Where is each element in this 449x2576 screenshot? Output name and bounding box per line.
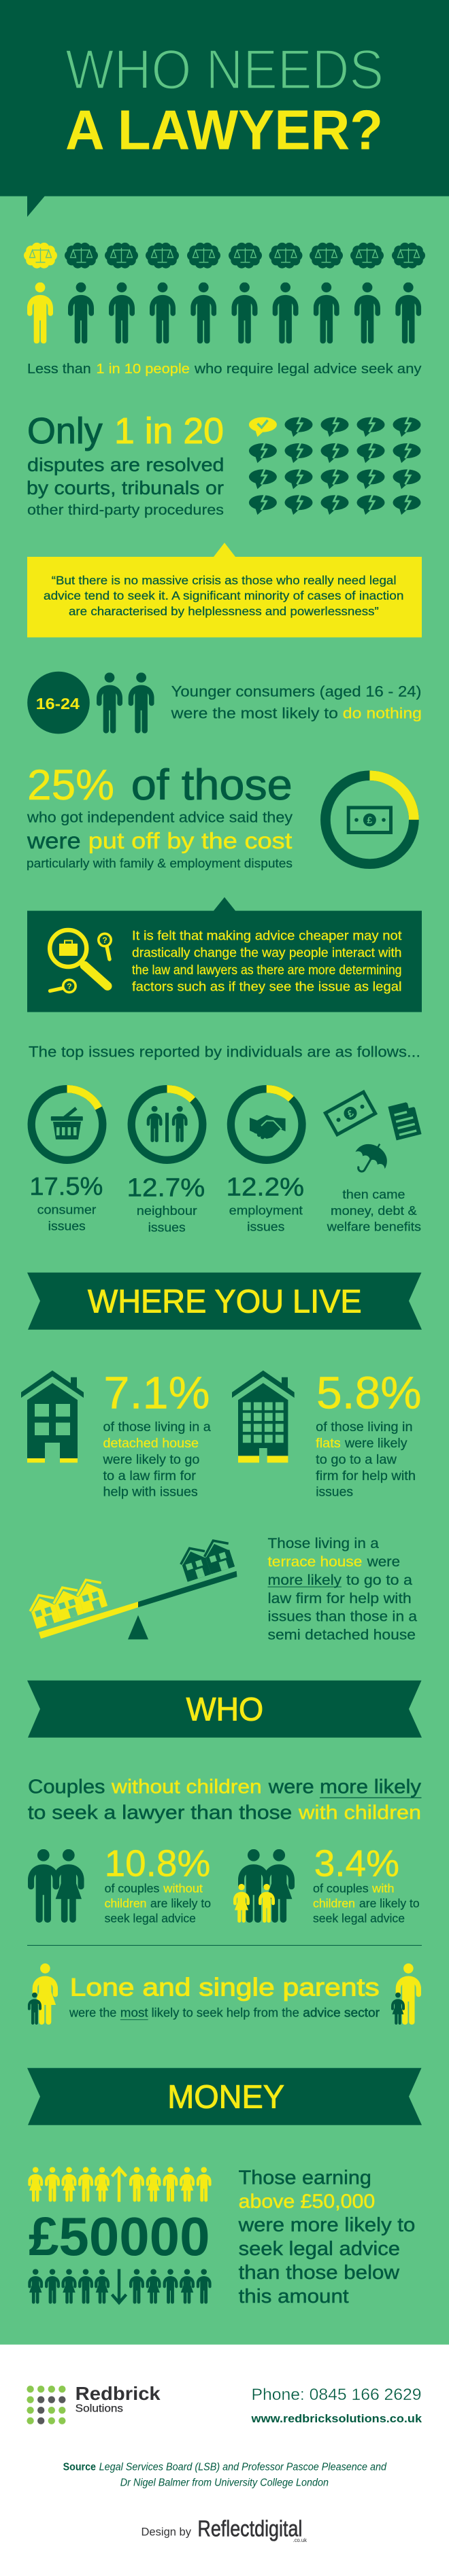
text block: disputes are resolved	[27, 454, 224, 475]
panel: consumer issues	[29, 1089, 103, 1233]
icon row: people below with down arrow	[28, 2269, 212, 2303]
text block: Younger consumers (aged 16 - 24)	[171, 683, 421, 700]
text block: advice sector	[303, 2006, 380, 2019]
text block: It is felt that making advice cheaper may not	[132, 929, 402, 944]
panel: 50000 pictogram	[28, 2167, 415, 2307]
label: consumer	[37, 1203, 96, 1217]
text block	[132, 929, 402, 994]
icon: umbrella	[348, 1135, 395, 1181]
text block: this amount	[239, 2286, 349, 2307]
text block: who got independent advice said they	[27, 808, 293, 825]
callout: quote: “But there is no massive crisis as those who really need legal	[52, 573, 397, 587]
chart: 25 percent ring with banknote: £	[367, 814, 373, 825]
icon: magnifying glasses with briefcase: ?	[102, 935, 107, 945]
text block: by courts, tribunals or	[27, 477, 224, 498]
callout: quote: advice tend to seek it. A significant minority of cases of inaction	[44, 589, 403, 602]
stat: 7.1%	[103, 1367, 210, 1418]
icon row: thought clouds with scales	[24, 243, 425, 269]
banner: money: MONEY	[167, 2079, 284, 2116]
icon: check bubble	[249, 417, 277, 437]
text block: were more likely to	[238, 2214, 415, 2236]
text block: were likely	[344, 1436, 408, 1451]
icon: tilted banknote: £	[346, 1107, 355, 1119]
banner: money	[27, 2068, 422, 2125]
contact details: www.redbricksolutions.co.uk	[250, 2412, 422, 2425]
icon: handshake	[250, 1115, 286, 1139]
icon: neighbours	[147, 1106, 188, 1142]
panel: 25 percent put off by cost	[27, 761, 414, 870]
panel: detached house	[21, 1367, 211, 1500]
icon: two people	[97, 672, 154, 734]
text block: were the	[69, 2006, 116, 2019]
chart: 25 percent ring with banknote	[325, 776, 414, 864]
text block: are likely to	[150, 1896, 211, 1910]
icon row: people	[27, 282, 421, 343]
source note: Legal Services Board (LSB) and Professor Pascoe Pleasence and	[99, 2462, 387, 2473]
stat: 17.5%	[29, 1172, 103, 1201]
text block: of couples	[313, 1882, 369, 1895]
stat: 12.2%	[226, 1173, 304, 1202]
panel: title header	[0, 0, 449, 217]
panel: terrace vs semi detached	[26, 1535, 417, 1643]
title line 1: WHO NEEDS	[65, 38, 384, 101]
callout: quote: are characterised by helplessness and powerlessness”	[69, 604, 379, 618]
text block: to go to a law	[316, 1452, 397, 1467]
text block: put off by the cost	[88, 828, 292, 853]
text block: above £50,000	[239, 2191, 375, 2212]
icon: couple	[28, 1849, 84, 1923]
text block	[313, 1882, 420, 1925]
text block: likely to seek help from the	[152, 2006, 299, 2019]
panel: flats	[232, 1367, 422, 1500]
text block: issues	[316, 1485, 353, 1500]
text block	[27, 411, 224, 518]
icon: magnifying glasses with briefcase: ?	[67, 982, 72, 991]
banner: who: WHO	[186, 1691, 263, 1728]
heading: couples: were	[268, 1776, 314, 1798]
icon: document	[388, 1101, 422, 1140]
text block: most	[120, 2006, 148, 2019]
banner: where you live	[27, 1273, 422, 1330]
text block	[316, 1420, 416, 1500]
design credit: Design by	[142, 2526, 192, 2538]
icon: block of flats	[232, 1371, 295, 1462]
source note	[63, 2462, 387, 2488]
text block	[238, 2167, 415, 2307]
text block: children	[105, 1896, 147, 1910]
design credit: .co.uk	[293, 2537, 307, 2543]
text block: of those living in	[316, 1420, 412, 1435]
panel: 1 in 10 pictogram	[24, 243, 425, 377]
heading: couples: to seek a lawyer than those	[28, 1802, 292, 1823]
text block: 1 in 20	[114, 411, 224, 451]
text block: were	[27, 828, 81, 853]
text block: children	[313, 1896, 355, 1910]
chart: 12.2 percent ring	[231, 1089, 302, 1160]
text block: seek legal advice	[313, 1912, 405, 1925]
text block: without	[163, 1882, 203, 1895]
icon: age badge: 16-24	[36, 695, 80, 712]
stat: 5.8%	[316, 1367, 422, 1418]
label: money, debt &	[331, 1203, 418, 1218]
stat: £50000	[29, 2206, 210, 2267]
text block: law firm for help with	[268, 1590, 412, 1607]
text block: were the most likely to	[171, 704, 338, 721]
contact details: Phone: 0845 166 2629	[252, 2386, 422, 2404]
panel: money, debt and welfare	[325, 1092, 422, 1234]
icon: see-saw	[39, 1571, 237, 1639]
text block: 25%	[27, 761, 114, 809]
text block: detached house	[103, 1436, 199, 1451]
contact details	[250, 2386, 422, 2425]
label: issues	[148, 1220, 186, 1234]
text block: factors such as if they see the issue as legal	[132, 979, 401, 994]
icon: mother and child	[28, 1963, 58, 2025]
chart: 17.5 percent ring	[31, 1089, 103, 1160]
panel: only 1 in 20	[27, 411, 420, 518]
label	[37, 1203, 96, 1233]
text block: help with issues	[103, 1485, 198, 1500]
icon: basket	[51, 1108, 83, 1139]
text block: were likely to go	[102, 1452, 200, 1467]
text block: than those below	[239, 2262, 400, 2284]
text block	[69, 2006, 380, 2020]
logo: Redbrick Solutions: Solutions	[76, 2403, 123, 2415]
text block: the law and lawyers as there are more determining	[132, 963, 401, 978]
text block	[102, 1420, 211, 1500]
panel: younger consumers	[27, 672, 422, 734]
callout: advice cheaper	[27, 897, 422, 1012]
text block: other third-party procedures	[27, 502, 224, 518]
design credit	[142, 2515, 307, 2543]
label: issues	[48, 1219, 86, 1233]
text block: Those earning	[239, 2167, 371, 2189]
text block	[171, 683, 422, 721]
text block: seek legal advice	[239, 2238, 400, 2260]
heading: couples: more likely	[320, 1776, 422, 1798]
icon: magnifying glasses with briefcase	[50, 930, 111, 993]
text block: are likely to	[359, 1896, 420, 1910]
panel: neighbour issues	[127, 1089, 205, 1234]
text block: do nothing	[343, 704, 422, 721]
heading: couples: without children	[111, 1776, 262, 1798]
caption: 1 in 10 people	[96, 361, 190, 377]
heading: couples: Couples	[28, 1776, 105, 1798]
text block: were	[367, 1553, 400, 1570]
label: then came	[342, 1187, 405, 1201]
icon row: people above with up arrow	[28, 2167, 212, 2202]
label: welfare benefits	[327, 1220, 421, 1234]
text block: particularly with family & employment disputes	[27, 856, 293, 870]
label	[229, 1203, 303, 1234]
source note: Source	[63, 2462, 96, 2473]
heading: Lone and single parents	[70, 1973, 380, 2002]
panel: employment issues	[226, 1089, 304, 1234]
text block: flats	[316, 1436, 341, 1451]
text block: terrace house	[268, 1553, 362, 1570]
heading: couples: with children	[298, 1802, 421, 1823]
label: employment	[229, 1203, 303, 1217]
logo: Redbrick Solutions: Redbrick	[76, 2383, 161, 2404]
caption: Less than	[27, 361, 91, 377]
chart: 12.7 percent ring	[131, 1089, 203, 1160]
icon: father and child	[391, 1963, 421, 2025]
text block: to a law firm for	[103, 1469, 196, 1483]
stat: 12.7%	[127, 1173, 205, 1202]
text block	[27, 761, 293, 870]
caption: who require legal advice seek any	[194, 361, 422, 377]
logo: Redbrick Solutions	[27, 2383, 161, 2424]
text block	[268, 1535, 417, 1643]
text block: with	[371, 1882, 395, 1895]
label	[137, 1203, 197, 1234]
text block: to go to a	[346, 1572, 412, 1588]
heading: top issues: The top issues reported by individuals are as follows...	[29, 1044, 420, 1061]
icon grid: speech bubbles	[249, 416, 420, 515]
text block: more likely	[268, 1572, 342, 1588]
text block: Only	[27, 411, 103, 451]
text block: Those living in a	[268, 1535, 379, 1551]
label	[327, 1187, 421, 1234]
text block: of couples	[105, 1882, 160, 1895]
label: neighbour	[137, 1203, 197, 1218]
text block: of those living in a	[103, 1420, 211, 1435]
panel: lone and single parents	[28, 1963, 421, 2025]
text block: semi detached house	[268, 1626, 416, 1643]
icon: tilted banknote	[325, 1092, 376, 1135]
callout: quote	[27, 543, 422, 638]
label: issues	[247, 1220, 284, 1234]
panel: couples without children	[28, 1842, 211, 1925]
text block: issues than those in a	[268, 1609, 417, 1625]
text block: drastically change the way people interact with	[132, 945, 401, 960]
icon: semi detached houses	[177, 1536, 236, 1582]
text block: firm for help with	[316, 1469, 416, 1483]
banner: who	[27, 1681, 422, 1738]
banner: where you live: WHERE YOU LIVE	[88, 1284, 362, 1320]
text block: seek legal advice	[105, 1912, 196, 1925]
panel: couples with children	[233, 1842, 420, 1925]
icon: age badge	[27, 672, 90, 734]
icon: family	[233, 1849, 295, 1923]
heading: couples	[28, 1776, 422, 1823]
stat: 3.4%	[314, 1842, 399, 1885]
stat: 10.8%	[105, 1842, 210, 1885]
icon: detached house	[21, 1371, 84, 1462]
design credit: Reflectdigital	[197, 2515, 302, 2541]
source note: Dr Nigel Balmer from University College London	[120, 2477, 329, 2488]
caption	[27, 361, 422, 377]
text block	[105, 1882, 211, 1925]
title line 2: A LAWYER?	[65, 99, 383, 162]
icon: terrace houses	[26, 1576, 109, 1629]
text block: of those	[131, 761, 293, 809]
